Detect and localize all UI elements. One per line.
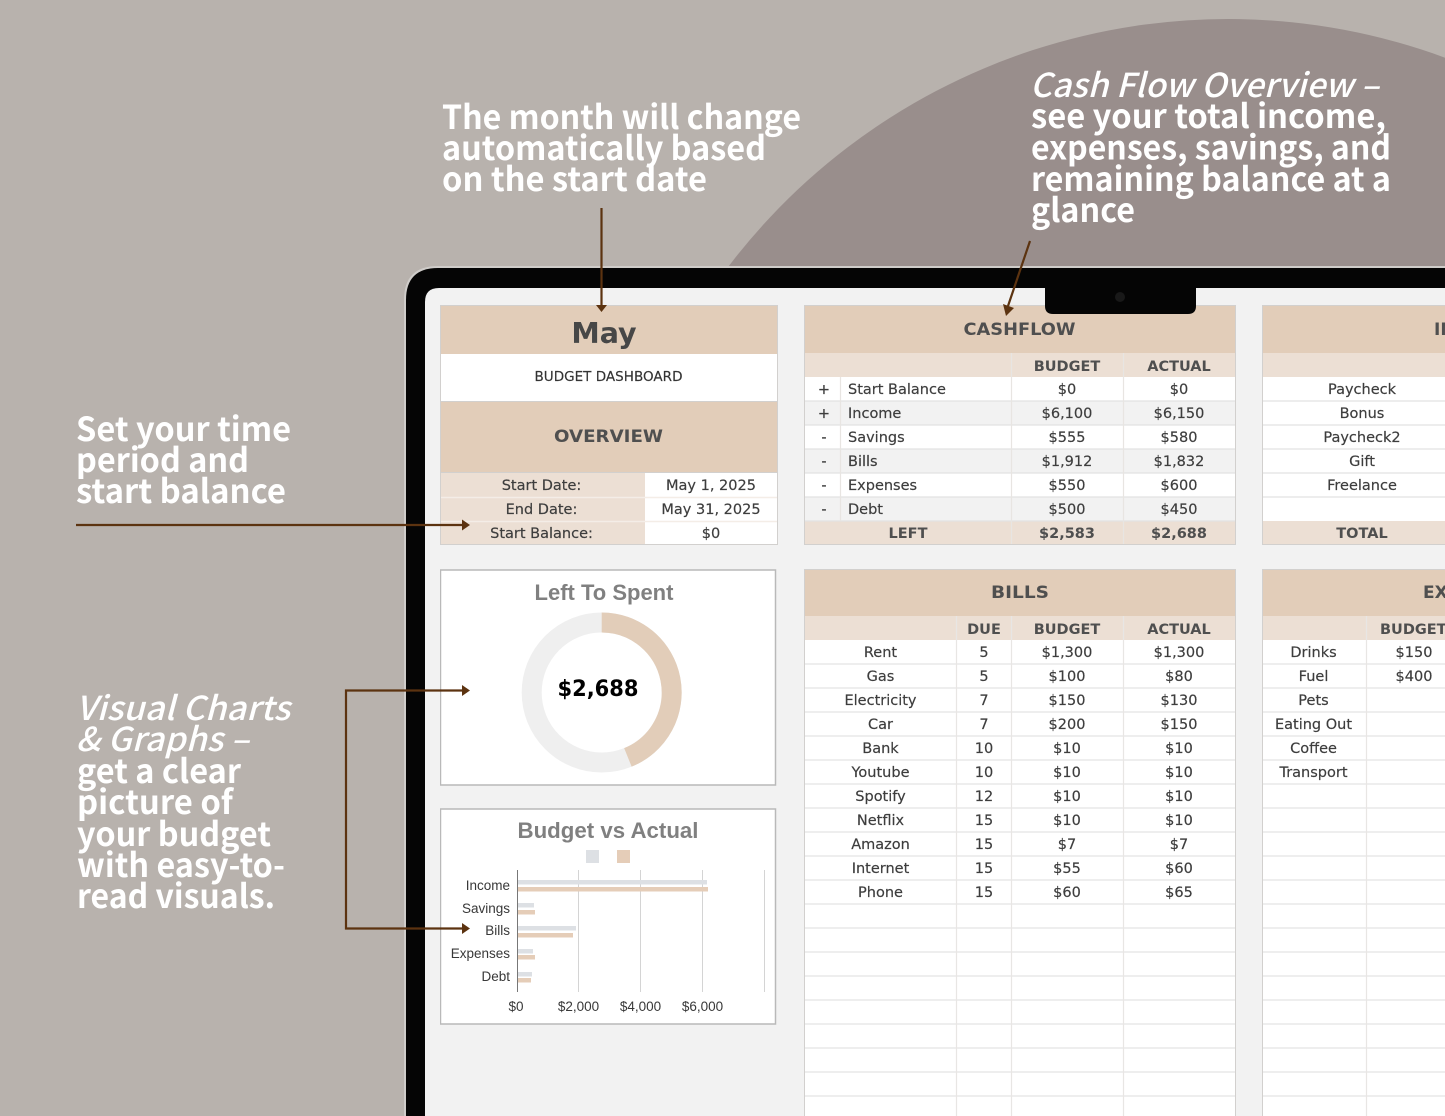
category labels: Savings (462, 901, 510, 916)
bills rows: Spotify (855, 789, 906, 805)
cashflow rows: - (821, 454, 827, 470)
expenses rows: Coffee (1290, 741, 1337, 757)
cashflow rows: $6,150 (1154, 406, 1204, 422)
cashflow rows: $2,583 (1039, 526, 1095, 542)
bills rows: $10 (1053, 741, 1081, 757)
cashflow rows: $1,912 (1042, 454, 1092, 470)
annotation: time period and start balance: start balance (76, 465, 286, 513)
bills rows: $150 (1161, 717, 1197, 733)
bills rows: Bank (862, 741, 899, 757)
expenses heading (1263, 570, 1445, 616)
bills rows: $10 (1165, 789, 1193, 805)
legend (586, 850, 630, 863)
cashflow rows: + (818, 382, 830, 398)
bills rows: Youtube (850, 765, 910, 781)
decorative circle behind device (705, 19, 1445, 300)
month header (441, 306, 777, 354)
bills rows: 10 (975, 741, 993, 757)
bills rows: $10 (1053, 813, 1081, 829)
cashflow rows: $0 (1170, 382, 1188, 398)
annotation: month changes automatically (442, 91, 801, 201)
bills column headers: ACTUAL (1147, 622, 1211, 638)
annotation: time period and start balance: period and (76, 434, 249, 482)
donut value: $2,688 (558, 677, 638, 702)
dashboard subtitle (441, 354, 777, 401)
income rows: Bonus (1340, 406, 1384, 422)
bills rows: $1,300 (1154, 645, 1204, 661)
annotation: time period and start balance (76, 403, 291, 513)
device: laptop frame and screen (404, 266, 1445, 1116)
annotation: visual charts and graphs: with easy-to- (77, 839, 285, 887)
bars (518, 880, 708, 982)
panel: budget vs actual bar chart (440, 809, 776, 1024)
cashflow rows: LEFT (889, 526, 928, 542)
cashflow heading: CASHFLOW (964, 320, 1076, 340)
cashflow rows: $580 (1161, 430, 1197, 446)
bills rows: Electricity (844, 693, 917, 709)
annotation: visual charts and graphs: & Graphs – (76, 713, 250, 761)
panel: bills table (804, 569, 1236, 1116)
bills rows: $80 (1165, 669, 1193, 685)
expenses rows: Fuel (1299, 669, 1328, 685)
arrow: bracket to charts (346, 685, 470, 934)
overview rows: May 31, 2025 (661, 502, 761, 518)
bills rows: 5 (979, 645, 989, 661)
annotation: cash flow overview: see your total income, (1031, 90, 1386, 138)
bills rows: $60 (1165, 861, 1193, 877)
overview rows: May 1, 2025 (666, 478, 756, 494)
donut chart (532, 622, 672, 762)
cashflow rows: $450 (1161, 502, 1197, 518)
category labels: Debt (481, 969, 510, 984)
annotation: month changes automatically: automatically based (442, 122, 766, 170)
dashboard subtitle: BUDGET DASHBOARD (534, 369, 682, 385)
expenses rows (1263, 616, 1445, 1116)
bills rows: $130 (1161, 693, 1197, 709)
bills rows: $10 (1165, 741, 1193, 757)
donut title: Left To Spent (535, 580, 674, 605)
category labels (451, 878, 510, 984)
panel: donut chart left to spent (440, 570, 776, 785)
annotation: month changes automatically: The month will change (442, 91, 801, 139)
annotation: cash flow overview (1030, 59, 1391, 232)
arrow: to month heading (596, 208, 607, 312)
panel: cashflow table (804, 305, 1236, 545)
cashflow rows: $2,688 (1151, 526, 1207, 542)
cashflow rows: - (821, 502, 827, 518)
bills rows: $55 (1053, 861, 1081, 877)
bills rows: $65 (1165, 885, 1193, 901)
axis labels: $2,000 (558, 999, 599, 1014)
axis labels: $6,000 (682, 999, 723, 1014)
arrow: to start balance (76, 520, 470, 530)
cashflow column headers (805, 353, 1235, 377)
bills rows: 15 (975, 885, 993, 901)
month header: May (571, 317, 637, 350)
axis labels (508, 999, 723, 1014)
income rows: TOTAL (1336, 526, 1388, 542)
bills column headers: DUE (967, 622, 1001, 638)
bills column headers: BUDGET (1034, 622, 1100, 638)
bills rows: 7 (979, 717, 989, 733)
expenses rows: Drinks (1290, 645, 1337, 661)
bills rows: Amazon (851, 837, 910, 853)
expenses rows: Eating Out (1275, 717, 1352, 733)
annotation: visual charts and graphs: your budget (77, 808, 271, 856)
category labels: Bills (485, 923, 510, 938)
income rows: Gift (1349, 454, 1375, 470)
annotation: cash flow overview: expenses, savings, and (1031, 122, 1391, 170)
annotation: visual charts and graphs: Visual Charts (76, 682, 293, 730)
expenses rows: $150 (1396, 645, 1432, 661)
overview heading: OVERVIEW (554, 427, 663, 447)
overview rows: End Date: (506, 502, 577, 518)
bills rows: $7 (1058, 837, 1076, 853)
bills heading (805, 570, 1235, 616)
income rows: Paycheck2 (1323, 430, 1401, 446)
bills rows: $1,300 (1042, 645, 1092, 661)
cashflow rows: Expenses (848, 478, 917, 494)
annotation: cash flow overview: Cash Flow Overview – (1030, 59, 1380, 107)
expenses column header (1263, 616, 1445, 640)
bills rows: 7 (979, 693, 989, 709)
bills rows: $100 (1049, 669, 1085, 685)
gridlines and axis (518, 870, 764, 992)
category labels: Expenses (451, 946, 510, 961)
axis labels: $4,000 (620, 999, 661, 1014)
cashflow rows: Debt (848, 502, 883, 518)
expenses rows: Transport (1278, 765, 1348, 781)
bills rows: $60 (1053, 885, 1081, 901)
bills rows: 15 (975, 837, 993, 853)
annotation: month changes automatically: on the start date (442, 153, 707, 201)
bills rows: $150 (1049, 693, 1085, 709)
income column header (1263, 353, 1445, 377)
annotation: time period and start balance: Set your time (76, 403, 291, 451)
cashflow rows: - (821, 430, 827, 446)
panel: expenses table (1262, 569, 1445, 1116)
cashflow heading (805, 306, 1235, 353)
bills rows: 15 (975, 861, 993, 877)
bills rows: Netflix (857, 813, 905, 829)
panel: month and overview (440, 305, 778, 545)
annotation: cash flow overview: remaining balance at a (1031, 153, 1391, 201)
overview heading (441, 402, 777, 472)
bills rows: $7 (1170, 837, 1188, 853)
income heading (1263, 306, 1445, 353)
bills column headers (805, 616, 1235, 640)
bills heading: BILLS (991, 583, 1049, 603)
bills rows: Phone (858, 885, 903, 901)
bills rows: Gas (867, 669, 894, 685)
cashflow rows: $600 (1161, 478, 1197, 494)
bills rows: Car (868, 717, 893, 733)
cashflow rows: $555 (1049, 430, 1085, 446)
cashflow rows: Bills (848, 454, 878, 470)
bills rows: 5 (979, 669, 989, 685)
bills rows: $10 (1165, 813, 1193, 829)
bills rows: 10 (975, 765, 993, 781)
bills rows: 12 (975, 789, 993, 805)
device notch with camera (1045, 287, 1196, 314)
bills rows: 15 (975, 813, 993, 829)
income rows: Freelance (1327, 478, 1397, 494)
cashflow rows: $6,100 (1042, 406, 1092, 422)
expenses rows: $400 (1396, 669, 1432, 685)
arrow: to cashflow heading (1003, 241, 1030, 316)
bills rows: $10 (1053, 789, 1081, 805)
cashflow rows: Income (848, 406, 901, 422)
bills rows: $200 (1049, 717, 1085, 733)
bills rows (805, 616, 1235, 1116)
annotation: visual charts and graphs: read visuals. (77, 870, 275, 918)
income rows (1263, 377, 1445, 544)
cashflow rows: $500 (1049, 502, 1085, 518)
overview rows: Start Date: (502, 478, 581, 494)
cashflow rows: - (821, 478, 827, 494)
category labels: Income (466, 878, 510, 893)
annotation: visual charts and graphs: picture of (77, 776, 235, 824)
overview rows (441, 473, 777, 544)
cashflow column headers: BUDGET (1034, 359, 1100, 375)
cashflow column headers: ACTUAL (1147, 359, 1211, 375)
bills rows: $10 (1053, 765, 1081, 781)
cashflow rows: $550 (1049, 478, 1085, 494)
cashflow rows: $1,832 (1154, 454, 1204, 470)
bills rows: Rent (864, 645, 897, 661)
annotation: visual charts and graphs: get a clear (77, 745, 242, 793)
cashflow rows (805, 353, 1235, 544)
chart title: Budget vs Actual (518, 818, 698, 843)
overview rows: Start Balance: (490, 526, 593, 542)
income rows: Paycheck (1328, 382, 1397, 398)
expenses rows: Pets (1298, 693, 1329, 709)
axis labels: $0 (508, 999, 524, 1014)
expenses column header: BUDGET (1380, 622, 1445, 638)
bills rows: Internet (852, 861, 910, 877)
bills rows: $10 (1165, 765, 1193, 781)
annotation: visual charts and graphs (76, 682, 293, 918)
overview rows: $0 (702, 526, 720, 542)
cashflow rows: Savings (848, 430, 905, 446)
panel: income table (1262, 305, 1445, 545)
cashflow rows: Start Balance (848, 382, 946, 398)
cashflow rows: + (818, 406, 830, 422)
cashflow rows: $0 (1058, 382, 1076, 398)
annotation: cash flow overview: glance (1031, 184, 1135, 232)
